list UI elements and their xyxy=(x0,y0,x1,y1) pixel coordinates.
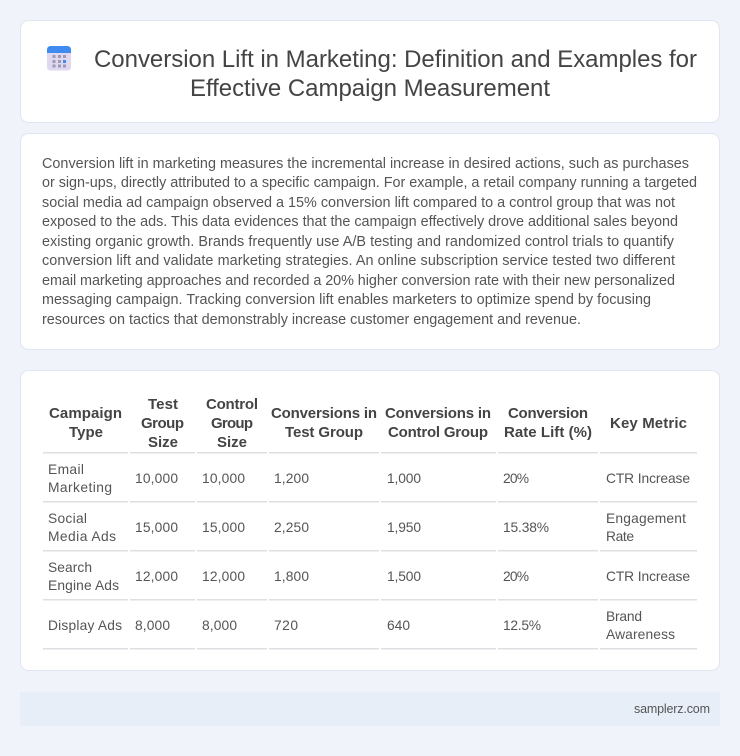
table row: Display Ads: 640 xyxy=(387,618,410,633)
table row: Search Engine Ads xyxy=(48,560,690,593)
table row: Social Media Ads: 15.38% xyxy=(503,520,549,535)
paragraph text: existing organic growth. Brands frequently use A/B testing and randomized control trials to quantify xyxy=(42,234,675,250)
table row: Social Media Ads: Media Ads xyxy=(48,529,116,544)
table row: Search Engine Ads: 1,800 xyxy=(274,569,309,584)
table row: Search Engine Ads: 20% xyxy=(503,569,529,584)
table header row: Conversions in xyxy=(385,405,491,422)
table row: Display Ads: 12.5% xyxy=(503,618,541,633)
table row: Social Media Ads: 1,950 xyxy=(387,520,421,535)
table row: Display Ads: 8,000 xyxy=(202,618,237,633)
table row: Search Engine Ads: Search xyxy=(48,560,92,575)
table row: Social Media Ads: 15,000 xyxy=(135,520,178,535)
table header row: Campaign xyxy=(49,405,122,422)
table row: Display Ads: Display Ads xyxy=(48,618,122,633)
table row: Email Marketing: 10,000 xyxy=(135,471,178,486)
paragraph text: resources on tactics that demonstrably increase customer engagement and revenue. xyxy=(42,312,581,328)
table row: Search Engine Ads: 12,000 xyxy=(135,569,178,584)
table row: Social Media Ads: 15,000 xyxy=(202,520,245,535)
table row: Display Ads: 8,000 xyxy=(135,618,170,633)
table row: Social Media Ads: Rate xyxy=(606,529,634,544)
table header row: Size xyxy=(148,434,178,451)
table header row: Size xyxy=(217,434,247,451)
footer source text: samplerz.com xyxy=(634,702,710,716)
table row: Social Media Ads: Social xyxy=(48,511,87,526)
paragraph text: email marketing approaches and recorded a 20% higher conversion rate with their new personalized xyxy=(42,273,675,289)
table header row: Test Group xyxy=(285,424,363,441)
paragraph text: exposed to the ads. This data evidences that the campaign effectively drove additional sales beyond xyxy=(42,214,678,230)
table row: Search Engine Ads: 1,500 xyxy=(387,569,421,584)
paragraph text: Conversion lift in marketing measures the incremental increase in desired actions, such as purchases xyxy=(42,156,689,172)
table row: Email Marketing: 20% xyxy=(503,471,529,486)
table header row: Control xyxy=(206,396,258,413)
paragraph text: social media ad campaign observed a 15% conversion lift compared to a control group that was not xyxy=(42,195,675,211)
table row: Display Ads: Brand xyxy=(606,609,642,624)
paragraph text: conversion lift and validate marketing strategies. An online subscription service tested two different xyxy=(42,253,675,269)
title text: Effective Campaign Measurement xyxy=(190,75,550,102)
table header row: Group xyxy=(141,415,184,432)
table row: Display Ads: 720 xyxy=(274,618,298,633)
table row: Display Ads: Awareness xyxy=(606,627,675,642)
table header row: Conversion xyxy=(508,405,588,422)
table row: Search Engine Ads: CTR Increase xyxy=(606,569,690,584)
panel: description xyxy=(20,134,720,350)
table row: Email Marketing: 10,000 xyxy=(202,471,245,486)
title text xyxy=(94,46,697,102)
title text: Conversion Lift in Marketing: Definition and Examples for xyxy=(94,46,697,73)
table row: Social Media Ads: 2,250 xyxy=(274,520,309,535)
table rules xyxy=(43,452,697,650)
table row: Social Media Ads xyxy=(48,511,686,544)
paragraph text: messaging campaign. Tracking conversion lift enables marketers to optimize spend by focusing xyxy=(42,292,651,308)
paragraph text: or sign-ups, directly attributed to a specific campaign. For example, a retail company running a targeted xyxy=(42,175,697,191)
table row: Display Ads xyxy=(48,609,675,642)
footer bar xyxy=(20,692,720,726)
table row: Email Marketing: Email xyxy=(48,462,84,477)
table row: Search Engine Ads: Engine Ads xyxy=(48,578,119,593)
table header row: Control Group xyxy=(388,424,488,441)
table row: Email Marketing xyxy=(48,462,690,495)
table row: Email Marketing: 1,200 xyxy=(274,471,309,486)
table header row: Rate Lift (%) xyxy=(504,424,592,441)
table header row xyxy=(49,396,687,451)
table row: Email Marketing: 1,000 xyxy=(387,471,421,486)
icon: calendar xyxy=(47,46,71,70)
table header row: Key Metric xyxy=(610,415,687,432)
panel: title xyxy=(20,20,720,122)
table row: Email Marketing: CTR Increase xyxy=(606,471,690,486)
table row: Search Engine Ads: 12,000 xyxy=(202,569,245,584)
table header row: Conversions in xyxy=(271,405,377,422)
table row: Email Marketing: Marketing xyxy=(48,480,112,495)
panel: comparison table xyxy=(20,370,720,670)
table row: Social Media Ads: Engagement xyxy=(606,511,686,526)
paragraph text xyxy=(42,156,697,328)
table header row: Group xyxy=(211,415,253,432)
table header row: Test xyxy=(148,396,178,413)
table header row: Type xyxy=(69,424,103,441)
